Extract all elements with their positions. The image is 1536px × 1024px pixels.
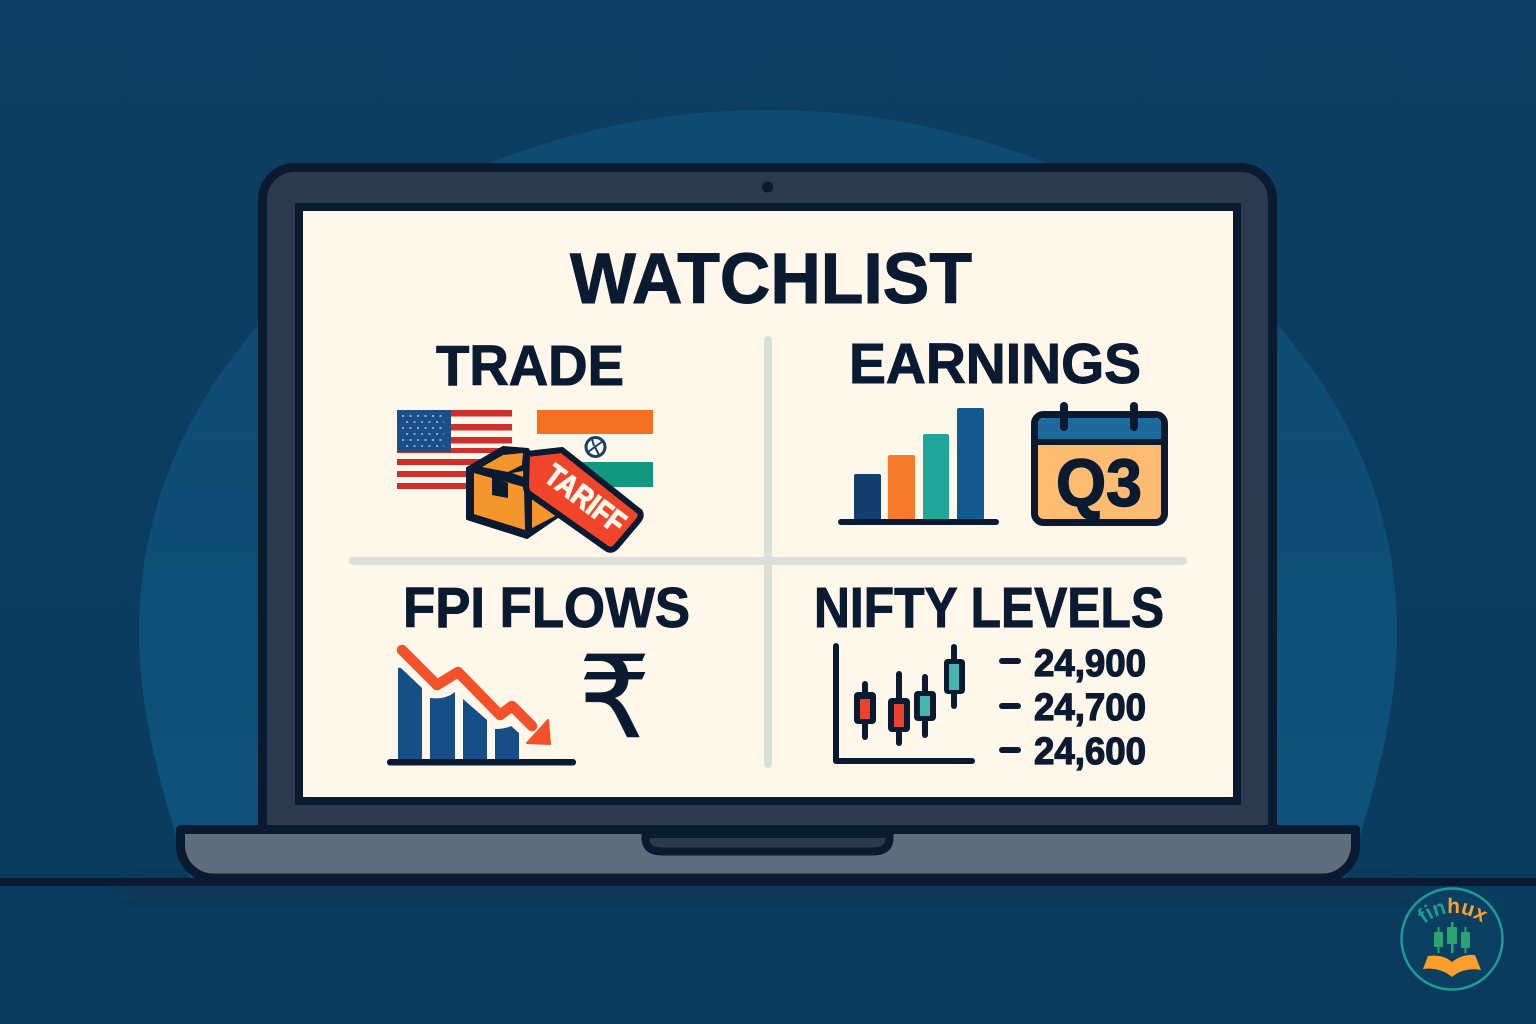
heading: nifty levels: NIFTY LEVELS <box>814 576 1164 640</box>
title: WATCHLIST <box>570 240 972 319</box>
laptop <box>0 168 1536 886</box>
falling arrow <box>402 650 532 726</box>
icon: parcel box <box>467 447 562 538</box>
laptop lid <box>262 168 1272 832</box>
icon: rupee symbol: ₹ <box>578 635 651 762</box>
icon: tariff tag <box>526 450 641 550</box>
level 24,700: 24,700 <box>1034 687 1146 729</box>
icon: india flag <box>537 410 653 487</box>
ground shadow <box>120 884 1416 900</box>
level 24,900: 24,900 <box>1034 643 1146 685</box>
candle 3 <box>914 674 936 738</box>
candle 4 <box>944 644 965 709</box>
ground line <box>0 878 1536 886</box>
logo: finhux <box>1400 887 1504 991</box>
chart: falling fpi flows <box>387 650 576 766</box>
tag label: TARIFF <box>538 457 633 540</box>
candlestick chart: nifty <box>836 644 972 761</box>
heading: earnings: EARNINGS <box>849 332 1141 396</box>
icon: calendar q3 <box>1034 402 1164 522</box>
horizontal divider <box>349 557 1187 565</box>
heading: trade: TRADE <box>436 334 624 398</box>
bar chart: earnings <box>838 408 999 525</box>
levels list <box>999 643 1146 773</box>
laptop base <box>180 830 1356 878</box>
logo book <box>1423 955 1481 977</box>
trackpad notch <box>646 834 890 852</box>
logo wordmark: finhux <box>1418 898 1488 923</box>
vertical divider <box>764 336 772 768</box>
screen panel <box>299 207 1237 801</box>
candle 1 <box>854 681 876 740</box>
heading: fpi flows: FPI FLOWS <box>403 576 690 640</box>
candle 2 <box>888 671 910 746</box>
icon: us flag <box>397 410 512 489</box>
logo candles <box>1434 922 1470 953</box>
calendar label: Q3 <box>1056 446 1142 521</box>
level 24,600: 24,600 <box>1034 731 1146 773</box>
background halo circle <box>139 110 1397 878</box>
screen <box>299 207 1237 801</box>
webcam <box>762 182 773 192</box>
